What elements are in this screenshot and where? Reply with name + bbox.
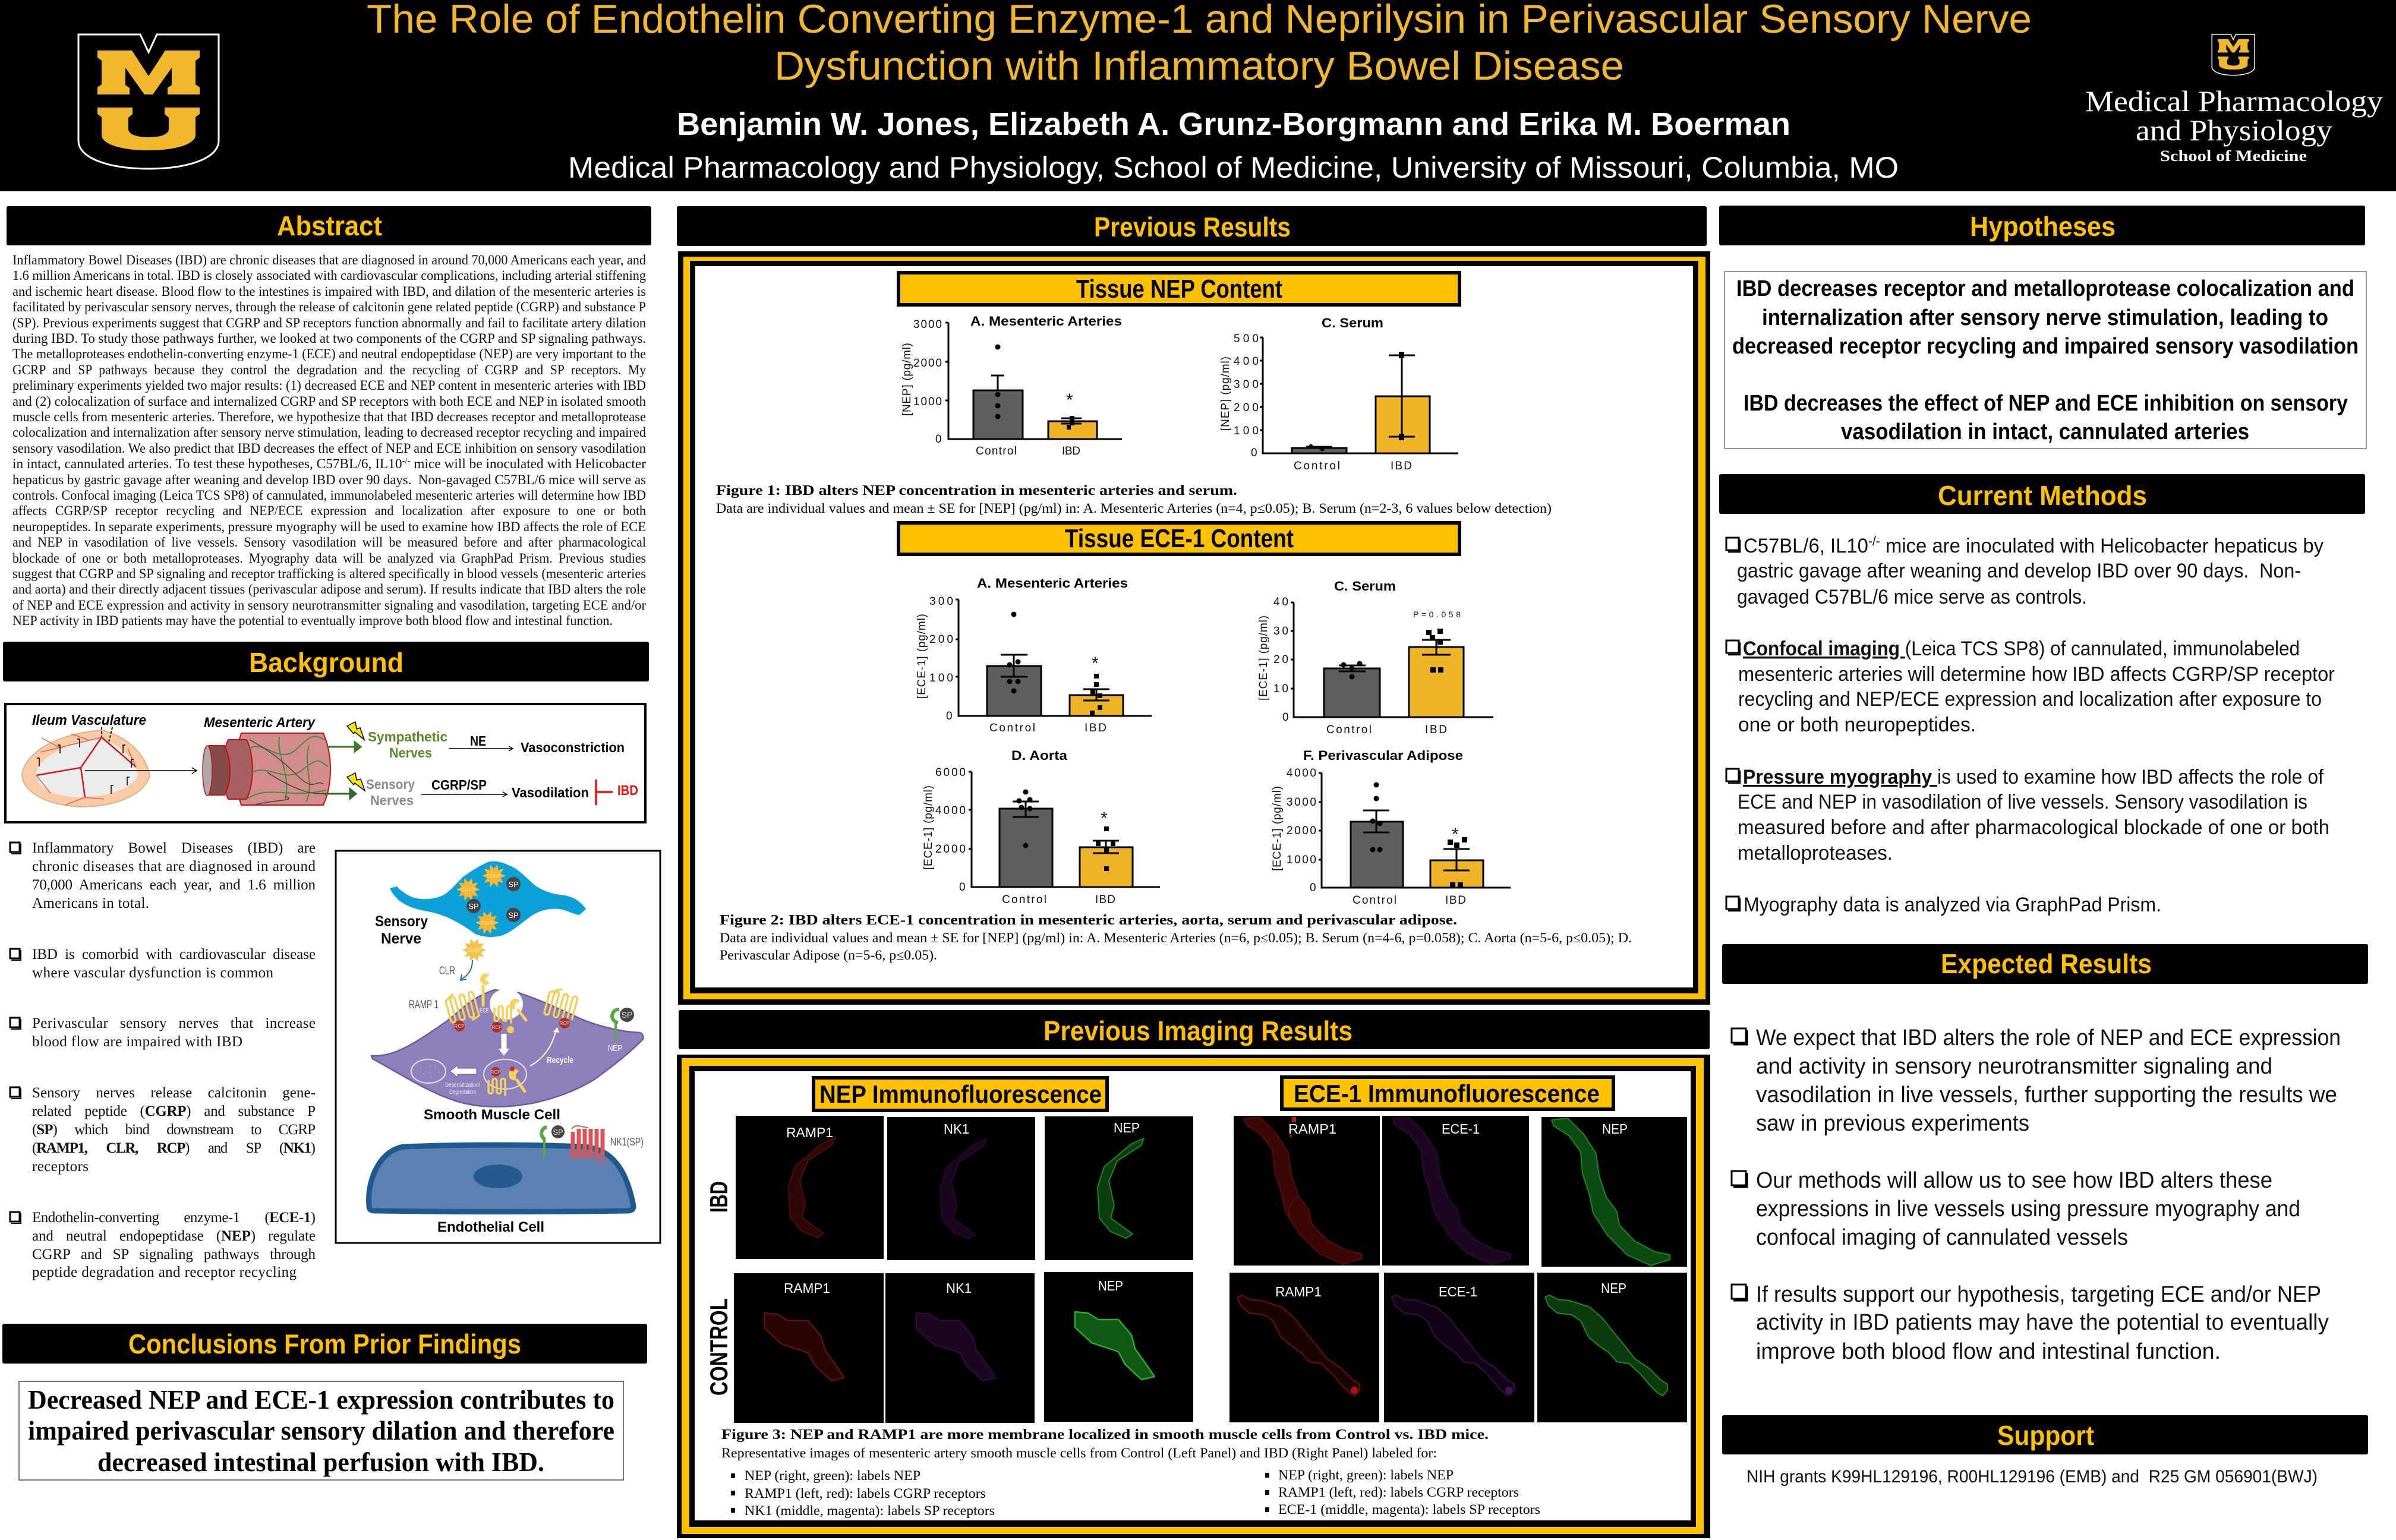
abstract text: mice will be inoculated with Helicobacter <box>411 456 646 472</box>
department wordmark: Medical Pharmacology <box>2085 84 2383 118</box>
chart: ECE-1 perivascular adipose: [ECE-1] (pg/ml) <box>1271 786 1284 871</box>
bullet: sensory nerves impaired <box>10 1015 316 1050</box>
bullet: therapeutic potential: If results support our hypothesis, targeting ECE and/or NEP <box>1756 1282 2321 1307</box>
abstract text: controls. Confocal imaging (Leica TCS SP8) of cannulated, immunolabeled mesenteric arteries will determine how IBD <box>12 488 646 503</box>
heading: Conclusions From Prior Findings <box>2 1324 647 1364</box>
chart: ECE-1 aorta <box>922 748 1160 906</box>
hypotheses box: vasodilation in intact, cannulated arteries <box>1841 419 2249 444</box>
image: IBD RAMP1 (ECE set) <box>1234 1116 1380 1266</box>
heading: Expected Results: Expected Results <box>1941 948 2152 979</box>
image: IBD ECE-1: ECE-1 <box>1442 1121 1480 1137</box>
bullet: pressure myography: ECE and NEP in vasodilation of live vessels. Sensory vasodilation is <box>1738 791 2307 813</box>
label: sensory nerve <box>375 913 428 947</box>
image: IBD NK1 <box>887 1117 1035 1260</box>
arrow: sympathetic branch <box>327 742 361 752</box>
conclusion box: Decreased NEP and ECE-1 expression contributes to <box>28 1384 614 1415</box>
label: sensory nerve: Sensory <box>375 913 428 930</box>
bullet: IBD prevalence: 70,000 Americans each year, and 1.6 million <box>32 877 316 893</box>
icon: lightning sensory <box>347 773 365 791</box>
vesicles and trafficking arrows <box>411 1027 559 1089</box>
image: IBD RAMP1 (ECE set): RAMP1 <box>1288 1121 1336 1137</box>
chart: ECE-1 mesenteric arteries <box>916 576 1152 734</box>
bullet: mouse model <box>1726 534 2324 608</box>
heading: Conclusions From Prior Findings: Conclusions From Prior Findings <box>128 1328 521 1359</box>
chart: ECE-1 mesenteric arteries: A. Mesenteric Arteries <box>977 576 1128 591</box>
chart: ECE-1 mesenteric arteries: 200 <box>929 633 953 646</box>
image: control ECE-1 <box>1384 1273 1534 1422</box>
smooth muscle cell illustration: RCP <box>491 1069 500 1075</box>
bullet: CGRP and SP: (RAMP1, CLR, RCP) and SP (NK1) <box>32 1140 316 1156</box>
ileum vasculature illustration <box>22 712 150 807</box>
hypotheses box: internalization after sensory nerve stimulation, leading to <box>1762 305 2328 330</box>
legend: ECE set: RAMP1 (left, red): labels CGRP receptors <box>1278 1485 1519 1500</box>
chart: ECE-1 serum: Control <box>1326 724 1372 736</box>
image: IBD NEP: NEP <box>1114 1120 1140 1135</box>
chart: NEP serum: Control <box>1294 460 1340 472</box>
chart: ECE-1 serum: C. Serum <box>1334 579 1396 594</box>
caption: figure 2 <box>720 913 1632 962</box>
heading: Current Methods <box>1719 474 2365 514</box>
chart: ECE-1 perivascular adipose: Control <box>1353 894 1396 907</box>
image: control RAMP1 (NEP set) <box>734 1273 884 1423</box>
abstract text: (SP). Previous experiments suggest that CGRP and SP receptors function abnormally and fail to facilitate artery dilation <box>12 315 646 331</box>
chart: ECE-1 serum: 0 <box>1282 711 1289 724</box>
mesenteric artery illustration <box>203 715 330 805</box>
bullet: comorbidity: where vascular dysfunction is common <box>32 965 273 981</box>
title: Dysfunction with Inflammatory Bowel Disease <box>774 43 1624 89</box>
smooth muscle cell illustration <box>371 974 643 1107</box>
abstract text: of NEP and ECE expression and activity in sensory neurotransmitter signaling and vasodilation, targeting ECE and/or <box>12 598 646 613</box>
label: sensory nerves: Sensory <box>366 777 415 792</box>
image: control NK1: NK1 <box>946 1280 972 1296</box>
released CGRP and CLR arrow <box>439 939 486 980</box>
abstract text: in intact, cannulated arteries. To test these hypotheses, C57BL/6, IL10 <box>12 456 405 472</box>
image: IBD NEP <box>1045 1116 1193 1260</box>
CGRP receptors <box>444 986 579 1095</box>
NEP receptor on smooth muscle: SP <box>622 1010 632 1020</box>
caption: figure 3: Representative images of mesenteric artery smooth muscle cells from Control (Left Panel) and IBD (Right Panel) labeled for: <box>721 1446 1437 1460</box>
abstract text: during IBD. To study those pathways further, we looked at two components of the CGRP and SP signaling pathways. <box>12 331 646 346</box>
bullet: comorbidity: IBD is comorbid with cardiovascular disease <box>32 946 316 962</box>
bullet: pressure myography: Pressure myography is used to examine how IBD affects the role of <box>1743 766 2324 788</box>
chart: ECE-1 mesenteric arteries: IBD <box>1084 722 1106 734</box>
chart: ECE-1 aorta: 6000 <box>935 766 966 779</box>
image: control ECE-1: ECE-1 <box>1439 1284 1477 1299</box>
department wordmark <box>2085 84 2383 165</box>
sensory nerve illustration: SP <box>508 911 519 920</box>
chart: NEP mesenteric arteries: A. Mesenteric Arteries <box>970 314 1122 329</box>
NEP receptor on smooth muscle: NEP <box>608 1043 622 1053</box>
smooth muscle cell illustration: Recycle <box>547 1055 573 1065</box>
chart: ECE-1 mesenteric arteries: 0 <box>946 710 953 722</box>
abstract text: muscle cells from mesenteric arteries. Therefore, we hypothesize that that IBD decreases receptor and metalloprotease <box>12 409 646 425</box>
smooth muscle cell illustration: RCP <box>560 1021 569 1026</box>
image: control NEP <box>1044 1272 1193 1422</box>
chart: NEP mesenteric arteries: 1000 <box>913 396 942 408</box>
bullet: expected change <box>1732 1025 2341 1136</box>
legend: ECE set: ECE-1 (middle, magenta): labels SP receptors <box>1278 1502 1540 1517</box>
department wordmark: and Physiology <box>2136 113 2332 147</box>
chart: NEP mesenteric arteries <box>901 314 1122 457</box>
bullet: methods allow: expressions in live vessels using pressure myography and <box>1756 1197 2300 1222</box>
bullet: IBD prevalence: Americans in total. <box>32 895 149 911</box>
abstract text: neuropeptides. In separate experiments, pressure myography will be used to examine how IBD affects the role of ECE <box>12 519 646 535</box>
header banner <box>0 0 2396 191</box>
chart: ECE-1 perivascular adipose: * <box>1452 825 1459 844</box>
bullet: mouse model: gavaged C57BL/6 mice serve as controls. <box>1737 586 2087 608</box>
bullet: IBD prevalence: Inflammatory Bowel Diseases (IBD) are <box>32 840 316 856</box>
panel: signaling pathway diagram <box>336 851 660 1243</box>
image: IBD NK1: NK1 <box>944 1121 969 1137</box>
image: control NEP (ECE set) <box>1537 1273 1687 1422</box>
label: RAMP 1: RAMP 1 <box>409 999 439 1011</box>
heading: Previous Imaging Results: Previous Imaging Results <box>1043 1015 1353 1046</box>
chart: ECE-1 serum: IBD <box>1425 724 1447 736</box>
chart: NEP mesenteric arteries: * <box>1066 390 1073 410</box>
heading: Support <box>1722 1415 2368 1454</box>
bullet: therapeutic potential: activity in IBD patients may have the potential to eventually <box>1756 1310 2329 1335</box>
abstract text: and (2) colocalization of surface and internalized CGRP and SP receptors with both ECE and NEP in isolated smooth <box>12 394 646 409</box>
heading: Hypotheses <box>1719 206 2365 245</box>
released CGRP and CLR arrow: CLR <box>439 965 455 977</box>
bullet: expected change: vasodilation in live vessels, further supporting the results we <box>1756 1083 2337 1107</box>
smooth muscle cell illustration: RCP <box>492 1025 502 1030</box>
image: control RAMP1 (ECE set): RAMP1 <box>1275 1284 1322 1299</box>
chart: ECE-1 serum: P=0.058 <box>1413 610 1461 619</box>
label: endothelial cell: Endothelial Cell <box>437 1219 544 1235</box>
abstract text: blockade of one or both metalloproteases. Myography data will be analyzed via GraphPad Prism. Previous studies <box>12 551 646 566</box>
panel: imaging results <box>677 1055 1710 1538</box>
heading: Current Methods: Current Methods <box>1938 480 2147 511</box>
smooth muscle cell illustration: Desensitization/ <box>445 1082 480 1088</box>
chart: NEP mesenteric arteries: [NEP] (pg/ml) <box>901 343 913 416</box>
chart: NEP serum <box>1219 315 1458 472</box>
NEP receptor on smooth muscle <box>608 1008 634 1053</box>
caption: figure 2: Figure 2: IBD alters ECE-1 concentration in mesenteric arteries, aorta, serum and perivascular adipose. <box>720 913 1457 928</box>
label: sensory nerve: Nerve <box>381 930 421 947</box>
chart: ECE-1 perivascular adipose: 0 <box>1310 882 1316 894</box>
bullet: ECE-1 and NEP: CGRP and SP signaling pathways through <box>32 1246 316 1263</box>
legend: NEP set <box>731 1468 995 1518</box>
bullet: ECE-1 and NEP <box>10 1210 316 1280</box>
label: sensory nerves: Nerves <box>370 793 414 808</box>
chart: ECE-1 serum <box>1257 579 1493 736</box>
bullet: sensory nerves impaired: blood flow are impaired with IBD <box>32 1034 242 1050</box>
panel: vasculature schematic <box>5 704 645 822</box>
chart: NEP serum: 300 <box>1234 378 1259 391</box>
label: sympathetic nerves: Nerves <box>389 745 432 760</box>
arrow: ileum to artery <box>85 768 197 774</box>
heading: Previous Results <box>677 206 1707 246</box>
caption: figure 3 <box>721 1427 1540 1518</box>
bullet: pressure myography <box>1726 766 2329 864</box>
chart: NEP serum: IBD <box>1391 460 1412 472</box>
chart: ECE-1 mesenteric arteries: * <box>1092 654 1099 673</box>
abstract text: hepaticus by gastric gavage after weaning and develop IBD over 90 days. Non-gavaged C57BL/6 mice will serve as <box>12 472 646 488</box>
endothelial cell illustration: SP <box>553 1128 563 1137</box>
abstract text <box>12 253 646 629</box>
bullet: IBD prevalence: chronic diseases that are diagnosed in around <box>32 859 316 875</box>
chart: ECE-1 perivascular adipose: 2000 <box>1287 825 1316 837</box>
image: control NEP (ECE set): NEP <box>1601 1280 1626 1296</box>
heading: Tissue ECE-1 Content <box>898 523 1459 554</box>
chart: ECE-1 serum: [ECE-1] (pg/ml) <box>1257 616 1270 700</box>
chart: ECE-1 perivascular adipose <box>1271 748 1511 907</box>
label: sensory nerves <box>366 777 415 808</box>
bullet: CGRP and SP: (SP) which bind downstream to CGRP <box>32 1122 316 1138</box>
abstract text: Inflammatory Bowel Diseases (IBD) are chronic diseases that are diagnosed in around 70,000 Americans each year, and <box>12 253 646 268</box>
caption: figure 3: Figure 3: NEP and RAMP1 are more membrane localized in smooth muscle cells from Control vs. IBD mice. <box>721 1427 1489 1443</box>
chart: ECE-1 aorta: D. Aorta <box>1011 748 1068 763</box>
heading: Tissue ECE-1 Content: Tissue ECE-1 Content <box>1065 524 1294 553</box>
endothelial cell illustration <box>369 1125 644 1212</box>
bullet: sensory nerves impaired: Perivascular sensory nerves that increase <box>32 1015 316 1031</box>
bullet: confocal imaging: mesenteric arteries will determine how IBD affects CGRP/SP receptor <box>1738 663 2335 686</box>
legend: ECE set <box>1265 1468 1540 1517</box>
chart: NEP serum: 400 <box>1234 355 1259 368</box>
label: sympathetic nerves <box>368 729 447 760</box>
title <box>367 0 2032 89</box>
bullet: expected change: We expect that IBD alters the role of NEP and ECE expression <box>1756 1025 2341 1050</box>
heading: Hypotheses: Hypotheses <box>1970 211 2116 242</box>
ECE enzymes <box>483 986 526 1091</box>
IBD inhibition marker: IBD <box>617 782 638 798</box>
chart: ECE-1 perivascular adipose: IBD <box>1445 894 1466 907</box>
bullet: comorbidity <box>10 946 316 981</box>
heading: Tissue NEP Content: Tissue NEP Content <box>1076 274 1282 304</box>
bullet: expected change: saw in previous experiments <box>1756 1111 2029 1136</box>
chart: NEP mesenteric arteries: 3000 <box>913 318 942 331</box>
label: NE to vasoconstriction: NE <box>470 733 486 749</box>
label: NE to vasoconstriction <box>449 733 625 755</box>
label: sympathetic nerves: Sympathetic <box>368 729 447 744</box>
support text: NIH grants K99HL129196, R00HL129196 (EMB) and R25 GM 056901(BWJ) <box>1746 1467 2318 1487</box>
abstract text: and NEP in vasodilation of live vessels. Sensory vasodilation will be measured before and after pharmacological <box>12 535 646 550</box>
abstract text: facilitated by perivascular sensory nerves, through the release of calcitonin gene related peptide (CGRP) and substance P <box>12 299 646 315</box>
legend: NEP set: NEP (right, green): labels NEP <box>745 1468 920 1483</box>
chart: NEP serum: C. Serum <box>1322 315 1383 330</box>
sensory nerve illustration: SP <box>508 880 519 889</box>
bullet: ECE-1 and NEP: peptide degradation and receptor recycling <box>32 1264 297 1280</box>
chart: ECE-1 perivascular adipose: 1000 <box>1287 854 1316 866</box>
bullet: pressure myography: metalloproteases. <box>1738 842 1893 864</box>
abstract text: preliminary experiments yielded two major results: (1) decreased ECE and NEP content in mesenteric arteries with IBD <box>12 378 646 393</box>
row label: CONTROL: CONTROL <box>705 1298 733 1396</box>
smooth muscle cell illustration: Degredation <box>449 1089 476 1096</box>
chart: ECE-1 perivascular adipose: F. Perivascular Adipose <box>1303 748 1463 763</box>
legend: NEP set: RAMP1 (left, red): labels CGRP receptors <box>745 1486 986 1501</box>
abstract text: suggest that CGRP and SP signaling and receptor trafficking is altered specifically in blood vessels (mesenteric arteries <box>12 566 646 582</box>
legend: NEP set: NK1 (middle, magenta): labels SP receptors <box>745 1503 995 1518</box>
bullet: therapeutic potential <box>1732 1282 2329 1364</box>
bullet: ECE-1 and NEP: and neutral endopeptidase (NEP) regulate <box>32 1228 316 1244</box>
bullet: analysis: Myography data is analyzed via GraphPad Prism. <box>1744 894 2161 916</box>
heading: Abstract: Abstract <box>277 210 382 241</box>
smooth muscle cell illustration: RCP <box>455 1024 464 1029</box>
abstract text: GCRP and SP pathways because they control the degradation and the recycling of CGRP and SP receptors. My <box>12 362 646 378</box>
conclusion box <box>19 1381 623 1480</box>
abstract text: and ischemic heart disease. Blood flow to the intestines is impaired with IBD, and dilation of the mesenteric arteries is <box>12 284 646 299</box>
bullet: mouse model: C57BL/6, IL10 <box>1744 535 1872 557</box>
chart: ECE-1 aorta: 2000 <box>935 843 966 856</box>
heading: Previous Imaging Results <box>679 1010 1710 1049</box>
chart: ECE-1 aorta: 0 <box>959 881 966 894</box>
label: NE to vasoconstriction: Vasoconstriction <box>521 740 625 755</box>
caption: figure 2: Data are individual values and mean ± SE for [NEP] (pg/ml) in: A. Mesenteric Arteries (n=6, p≤0.05); B. Serum (n=4-6, p=0.058); C. Aorta (n=5-6, p≤0.05); D. <box>720 930 1632 945</box>
bullet: CGRP and SP <box>10 1085 316 1175</box>
bullet: CGRP and SP: Sensory nerves release calcitonin gene- <box>32 1085 316 1101</box>
bullet: methods allow <box>1732 1168 2300 1250</box>
heading: Expected Results <box>1722 944 2368 984</box>
chart: NEP serum: [NEP] (pg/ml) <box>1219 356 1232 431</box>
conclusion box: decreased intestinal perfusion with IBD. <box>97 1447 544 1477</box>
chart: NEP serum: 100 <box>1234 425 1259 437</box>
bullet: IBD prevalence <box>10 840 316 911</box>
chart: ECE-1 aorta: * <box>1101 809 1108 828</box>
hypotheses box <box>1725 272 2366 449</box>
ileum vasculature illustration: Ileum Vasculature <box>32 712 146 728</box>
chart: ECE-1 aorta: IBD <box>1095 894 1115 906</box>
bullet: confocal imaging: one or both neuropeptides. <box>1738 714 1976 736</box>
sensory nerve illustration: CGRP <box>487 873 501 879</box>
image: IBD RAMP1 (NEP set): RAMP1 <box>786 1125 833 1140</box>
abstract text: NEP activity in IBD patients may have the potential to eventually improve both blood flow and intestinal function. <box>12 613 613 629</box>
bullet: confocal imaging <box>1726 638 2335 736</box>
bullet: methods allow: confocal imaging of cannulated vessels <box>1756 1225 2128 1250</box>
endothelial cell illustration: NK1(SP) <box>610 1136 644 1148</box>
abstract text: 1.6 million Americans in total. IBD is closely associated with cardiovascular complications, including arterial stiffening <box>12 268 646 283</box>
bullet: ECE-1 and NEP: Endothelin-converting enzyme-1 (ECE-1) <box>32 1210 316 1226</box>
caption: figure 1: Data are individual values and mean ± SE for [NEP] (pg/ml) in: A. Mesenteric Arteries (n=4, p≤0.05); B. Serum (n=2-3, 6 values below detection) <box>716 501 1552 516</box>
heading: Previous Results: Previous Results <box>1094 212 1291 242</box>
chart: NEP serum: 500 <box>1234 333 1259 345</box>
bullet: mouse model: gastric gavage after weaning and develop IBD over 90 days. Non- <box>1737 560 2301 582</box>
sensory nerve illustration <box>390 861 586 937</box>
chart: NEP mesenteric arteries: Control <box>976 445 1017 457</box>
heading: Support: Support <box>1997 1420 2094 1451</box>
icon: small MU logo <box>2212 34 2255 75</box>
chart: ECE-1 mesenteric arteries: 300 <box>929 595 953 608</box>
chart: NEP serum: 200 <box>1234 402 1259 414</box>
image: IBD RAMP1 (NEP set) <box>736 1116 884 1259</box>
label: CGRP/SP to vasodilation: CGRP/SP <box>431 777 487 793</box>
heading: NEP Immunofluorescence: NEP Immunofluorescence <box>819 1080 1102 1108</box>
sensory nerve illustration: CGRP <box>461 887 475 892</box>
image: IBD NEP (ECE set) <box>1541 1117 1687 1267</box>
image: control NEP: NEP <box>1098 1278 1123 1293</box>
bullet: confocal imaging: recycling and NEP/ECE expression and localization after exposure to <box>1738 688 2322 711</box>
image: control RAMP1 (ECE set) <box>1229 1273 1379 1422</box>
chart: NEP mesenteric arteries: 2000 <box>913 357 942 370</box>
abstract text: affects CGRP/SP receptor recycling and NEP/ECE expression and localization after exposure to one or both <box>12 503 646 519</box>
abstract text: and aorta) and their directly adjacent tissues (perivascular adipose and serum). If results indicate that IBD alters the role <box>12 582 646 597</box>
smooth muscle cell illustration: ECE <box>480 1007 489 1014</box>
label: smooth muscle cell: Smooth Muscle Cell <box>424 1107 560 1123</box>
bullet: CGRP and SP: related peptide (CGRP) and substance P <box>32 1103 316 1119</box>
IBD inhibition marker <box>596 780 638 805</box>
image: control NK1 <box>885 1273 1035 1423</box>
chart: ECE-1 mesenteric arteries: 100 <box>929 672 953 684</box>
conclusion box: impaired perivascular sensory dilation and therefore <box>28 1415 614 1446</box>
chart: ECE-1 aorta: 4000 <box>935 804 966 817</box>
abstract text: -/- <box>402 456 411 466</box>
sensory nerve illustration: SP <box>468 902 479 911</box>
chart: NEP mesenteric arteries: 0 <box>935 433 942 446</box>
heading: Abstract <box>7 206 651 245</box>
legend: ECE set: NEP (right, green): labels NEP <box>1278 1468 1454 1482</box>
icon: lightning sympathetic <box>347 722 364 740</box>
image: control RAMP1 (NEP set): RAMP1 <box>784 1280 830 1296</box>
caption: figure 2: Perivascular Adipose (n=5-6, p≤0.05). <box>720 948 937 962</box>
sensory nerve illustration: CGRP <box>480 920 494 926</box>
expected results list <box>1732 1025 2341 1364</box>
chart: ECE-1 aorta: Control <box>1002 894 1046 906</box>
chart: ECE-1 serum: 10 <box>1273 683 1288 695</box>
released CGRP and CLR arrow: CGRP <box>467 948 481 953</box>
image: IBD ECE-1 <box>1382 1116 1529 1266</box>
chart: ECE-1 serum: 30 <box>1273 625 1288 638</box>
chart: ECE-1 perivascular adipose: 4000 <box>1287 767 1316 780</box>
abstract text: The metalloproteases endothelin-converting enzyme-1 (ECE) and neutral endopeptidase (NEP) are very important to the <box>12 346 646 362</box>
chart: ECE-1 mesenteric arteries: [ECE-1] (pg/ml) <box>916 614 928 699</box>
caption: figure 1: Figure 1: IBD alters NEP concentration in mesenteric arteries and serum. <box>716 483 1237 498</box>
department wordmark: School of Medicine <box>2160 147 2307 165</box>
row label: IBD: IBD <box>705 1181 733 1213</box>
heading: Background: Background <box>249 647 403 678</box>
bullet: CGRP and SP: receptors <box>32 1159 89 1175</box>
bullet: mouse model: -/- <box>1868 534 1880 548</box>
heading: Tissue NEP Content <box>898 273 1459 305</box>
bullet: confocal imaging: Confocal imaging (Leica TCS SP8) of cannulated, immunolabeled <box>1743 638 2300 660</box>
authors: Benjamin W. Jones, Elizabeth A. Grunz-Borgmann and Erika M. Boerman <box>677 106 1790 142</box>
methods list <box>1726 534 2335 916</box>
heading: ECE-1 Immunofluorescence: ECE-1 Immunofluorescence <box>1294 1080 1600 1107</box>
arrow: sensory branch <box>323 789 356 799</box>
background bullet list <box>10 840 316 1280</box>
abstract text: sensory vasodilation. We also predict that IBD decreases the effect of NEP and ECE inhibition on sensory vasodilation <box>12 441 646 456</box>
bullet: pressure myography: measured before and after pharmacological blockade of one or both <box>1738 816 2329 839</box>
chart: ECE-1 mesenteric arteries: Control <box>989 722 1035 734</box>
chart: NEP serum: 0 <box>1251 447 1257 459</box>
bullet: expected change: and activity in sensory neurotransmitter signaling and <box>1756 1054 2272 1079</box>
icon: MU logo <box>78 34 219 169</box>
bullet: methods allow: Our methods will allow us to see how IBD alters these <box>1756 1168 2272 1193</box>
affiliation: Medical Pharmacology and Physiology, School of Medicine, University of Missouri, Columbia, MO <box>568 151 1899 184</box>
label: CGRP/SP to vasodilation: Vasodilation <box>512 785 589 800</box>
bullet: therapeutic potential: improve both blood flow and intestinal function. <box>1756 1339 2221 1364</box>
bullet: mouse model: mice are inoculated with Helicobacter hepaticus by <box>1880 535 2324 557</box>
mesenteric artery illustration: Mesenteric Artery <box>204 715 316 731</box>
chart: ECE-1 aorta: [ECE-1] (pg/ml) <box>922 785 935 870</box>
caption: figure 1 <box>716 483 1552 516</box>
heading: Background <box>3 642 649 681</box>
label: CGRP/SP to vasodilation <box>421 777 589 800</box>
chart: ECE-1 serum: 20 <box>1273 654 1288 666</box>
chart: ECE-1 perivascular adipose: 3000 <box>1287 796 1316 809</box>
image: IBD NEP (ECE set): NEP <box>1602 1121 1628 1137</box>
panel: previous results <box>678 251 1710 1005</box>
chart: NEP mesenteric arteries: IBD <box>1062 445 1080 457</box>
chart: ECE-1 serum: 40 <box>1273 596 1288 608</box>
abstract text: colocalization and internalization after sensory nerve stimulation, leading to decreased receptor recycling and impaired <box>12 425 646 440</box>
